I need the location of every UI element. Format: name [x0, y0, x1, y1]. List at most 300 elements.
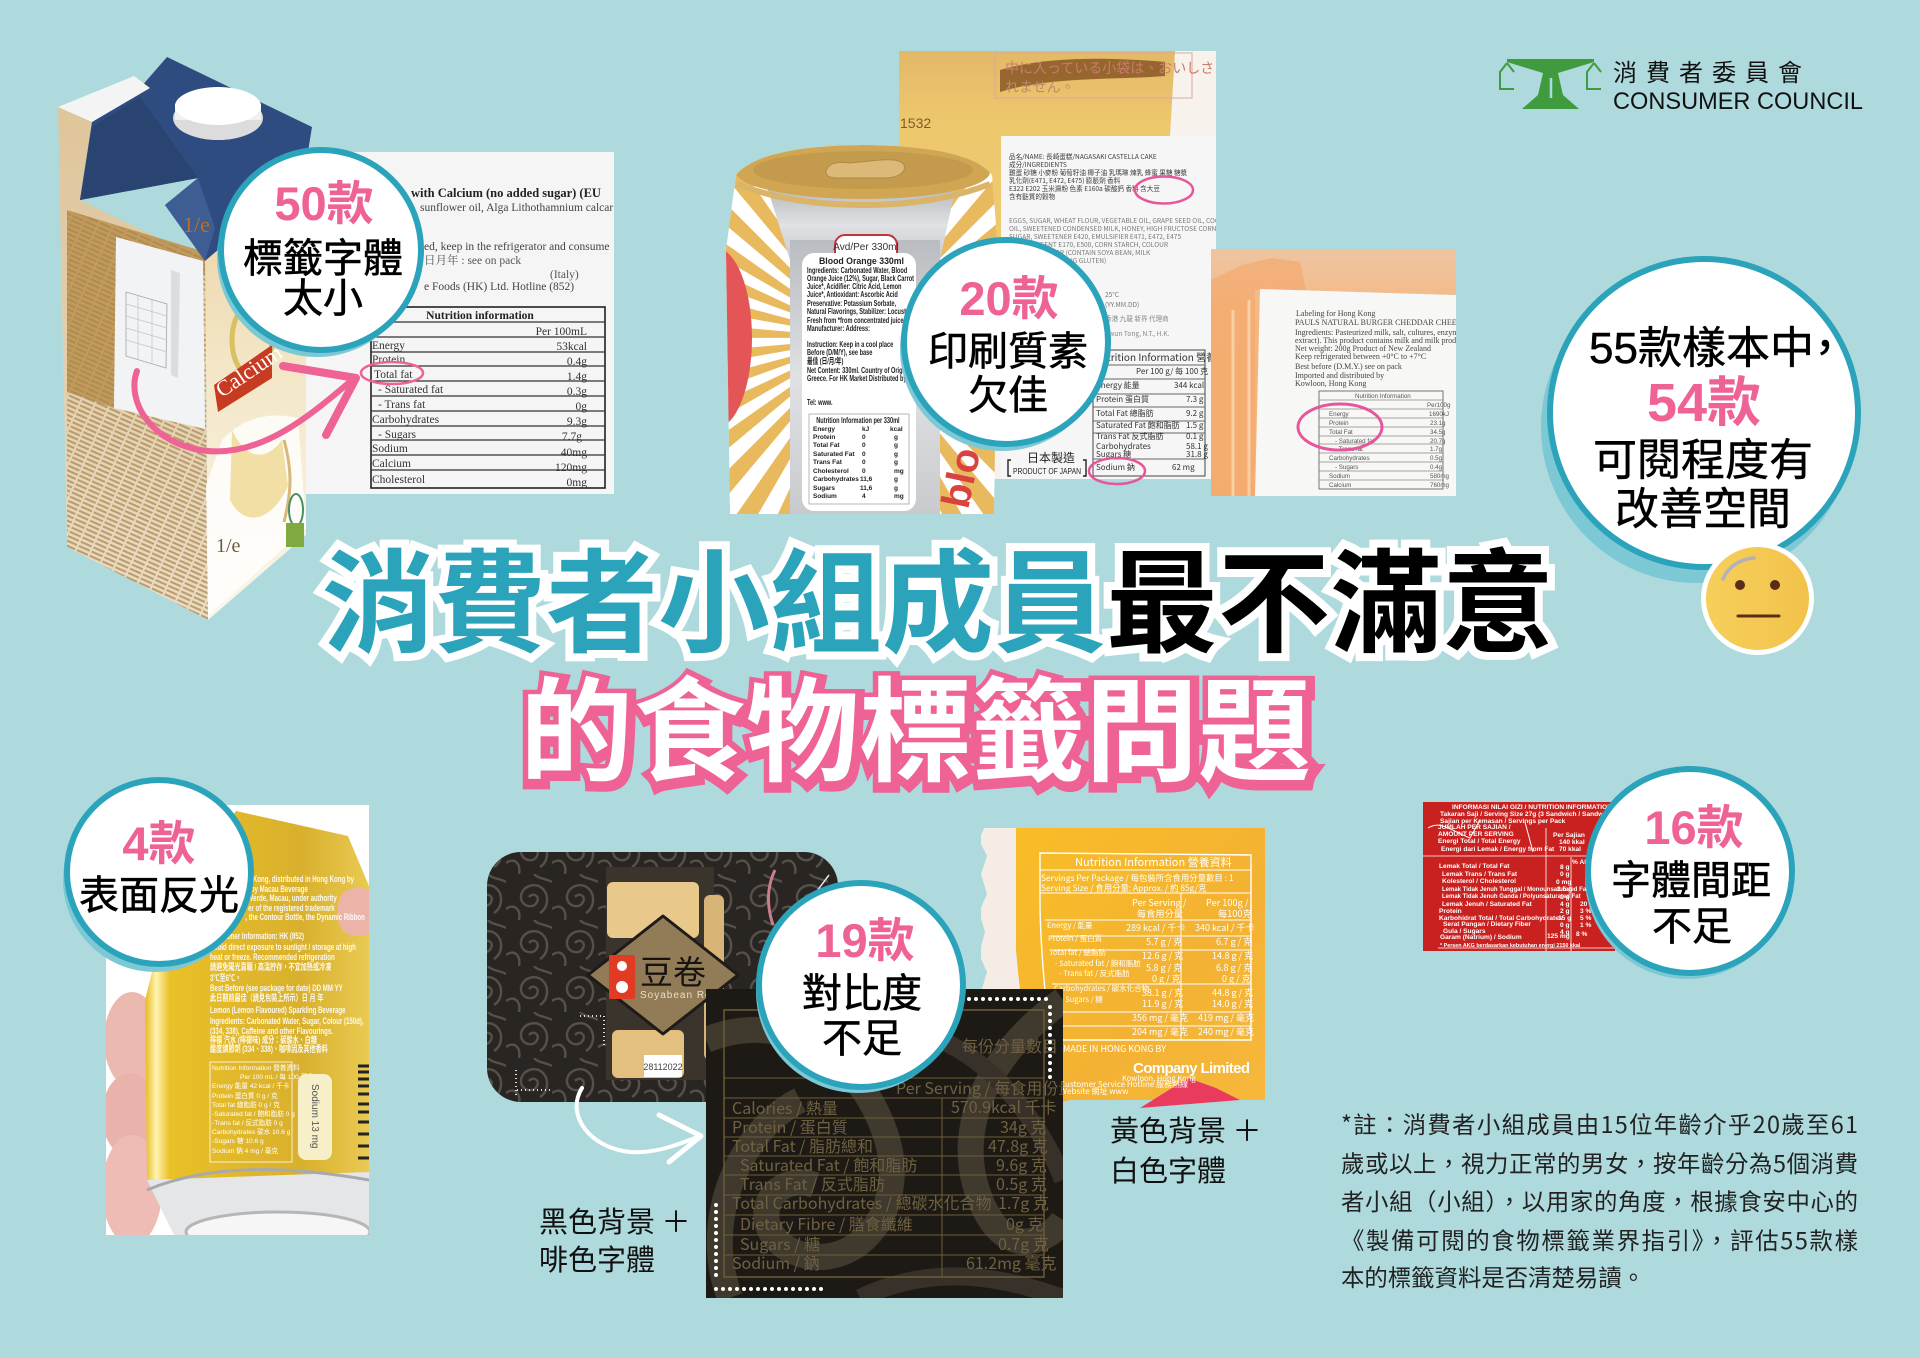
logo: Consumer Council: 消費者委員會: [1613, 53, 1811, 88]
photo: yellow snack pack with white text: 每100克: [1218, 906, 1252, 920]
panel: cake label photo: Sugars 糖: [1096, 449, 1131, 460]
panel: red label with tight text spacing: 4 g: [1560, 901, 1570, 908]
photo: yellow snack pack with white text: 289 kcal / 千卡: [1126, 921, 1185, 934]
panel: red label with tight text spacing: 1 g: [1560, 894, 1570, 901]
photo: reflective yellow can held in hand: -Saturated fat / 飽和脂肪 0 g: [212, 1109, 295, 1118]
callout: 19 samples low contrast: 不足: [822, 1017, 902, 1061]
panel: cheese label photo: 580mg: [1430, 473, 1449, 480]
panel: oat drink label enlargement: Energy: [372, 340, 405, 352]
panel: cheese label photo: Carbohydrates: [1329, 455, 1370, 462]
photo: blood orange drink can: Natural Flavorings, Stabilizer: Locust: [807, 306, 906, 316]
panel: red label with tight text spacing: Gula / Sugars: [1443, 928, 1486, 935]
photo: reflective yellow can held in hand: Consumer Information: HK (852): [210, 931, 304, 941]
panel: cake label photo: 0.1 g: [1186, 431, 1204, 442]
note text: [1341, 1106, 1858, 1293]
panel: red label with tight text spacing: 5 %: [1580, 915, 1591, 922]
photo: blood orange drink can: Juice*, Acidifier: Citric Acid, Lemon: [807, 281, 901, 291]
photo: dark label with low-contrast brown text: Trans Fat / 反式脂肪: [740, 1171, 885, 1195]
photo: yellow snack pack with white text: Carbohydrates / 碳水化合物: [1054, 983, 1150, 994]
title line 1: 消費者小組成員最不滿意: [322, 514, 1554, 676]
panel: cheese label photo: - Trans fat: [1335, 446, 1363, 453]
photo: dark label with low-contrast brown text: 每份分量數目 : 2: [962, 1033, 1079, 1057]
panel: red label with tight text spacing: % AKG: [1572, 859, 1594, 866]
photo: blood orange drink can: Carbohydrates: [813, 476, 859, 483]
panel: cheese label photo: Calcium: [1329, 482, 1351, 489]
panel: red label with tight text spacing: Protein: [1439, 908, 1462, 915]
panel: oat drink label enlargement: 1.4g: [567, 371, 587, 383]
title line 2: 的食物標籤問題: [520, 641, 1311, 805]
photo: reflective yellow can held in hand: er of the registered trademark: [248, 903, 335, 913]
panel: cheese label photo: Kowloon, Hong Kong: [1295, 379, 1366, 388]
panel: oat drink label enlargement: Protein: [372, 354, 405, 366]
panel: cheese label photo: - Saturated fat: [1335, 438, 1374, 445]
panel: oat drink label enlargement: Carbohydrates: [372, 414, 440, 426]
panel: cake label photo: 含有麩質的穀物: [1009, 191, 1056, 201]
photo: dark label with low-contrast brown text: Dietary Fibre / 膳食纖維: [740, 1211, 913, 1235]
photo: yellow snack pack with white text: Servings Per Package / 每包裝所含食用分量數目 : 1: [1041, 872, 1234, 884]
panel: cheese label photo: Labeling for Hong Kong: [1296, 309, 1375, 318]
callout: 4 samples reflective surface: 表面反光: [79, 874, 239, 918]
panel: oat drink label enlargement: 9.3g: [567, 416, 587, 428]
photo: blood orange drink can: mg: [894, 493, 904, 500]
photo: blood orange drink can: g: [894, 434, 898, 441]
photo: dark label with low-contrast brown text: 0g 克: [1006, 1211, 1044, 1235]
photo: blood orange drink can: 4: [862, 493, 866, 500]
caption: yellow background with white text: [1110, 1108, 1262, 1190]
photo: blood orange drink can: Sodium: [813, 493, 837, 500]
photo: yellow snack pack with white text: 0 g / 克: [1222, 972, 1251, 985]
photo: blood orange drink can: Nutrition Information per 330ml: [816, 415, 900, 425]
panel: oat drink label enlargement: ed, keep in the refrigerator and consume: [424, 241, 610, 253]
callout: 16 samples tight spacing: [1585, 769, 1792, 979]
photo: blood orange drink can: 最佳 (日/月/年): [807, 356, 844, 366]
photo: dark label with low-contrast brown text: Saturated Fat / 飽和脂肪: [740, 1152, 917, 1176]
panel: cheese label photo: Best before (D.M.Y.) see on pack: [1295, 362, 1402, 371]
panel: cake label photo: Carbohydrates: [1096, 441, 1151, 452]
photo: dark label with low-contrast brown text: Per Serving / 每食用份量: [896, 1075, 1074, 1099]
panel: cheese label photo: 1.7g: [1430, 446, 1443, 453]
logo: Consumer Council: CONSUMER COUNCIL: [1613, 88, 1863, 115]
callout: 50 samples font too small: [217, 150, 421, 357]
panel: red label with tight text spacing: JUMLAH PER SAJIAN /: [1438, 824, 1511, 831]
panel: red label with tight text spacing: * Persen AKG berdasarkan kebutuhan energi 2150 kkal: [1440, 943, 1581, 949]
panel: cake label photo: 品名/NAME: 長崎蛋糕/NAGASAKI CASTELLA CAKE: [1009, 151, 1157, 161]
panel: red label with tight text spacing: Energi dari Lemak / Energy from Fat: [1441, 846, 1555, 853]
photo: blood orange drink can: Tel: www.: [807, 397, 833, 407]
panel: red label with tight text spacing: Takaran Saji / Serving Size 27g (3 Sandwich / Sandwiches): [1440, 811, 1622, 818]
photo: blood orange drink can: g: [894, 459, 898, 466]
panel: red label with tight text spacing: Lemak Trans / Trans Fat: [1442, 871, 1518, 878]
photo: blood orange drink can: Juice*, Antioxidant: Ascorbic Acid: [807, 289, 898, 299]
photo: yellow snack pack with white text: Per 100g /: [1206, 895, 1249, 909]
panel: red label with tight text spacing: 1 %: [1580, 922, 1591, 929]
panel: red label with tight text spacing: 0 g: [1560, 871, 1570, 878]
panel: cake label photo: Energy 能量: [1096, 380, 1140, 391]
photo: blood orange drink can: Saturated Fat: [813, 451, 855, 458]
panel: cheese label photo: PAULS NATURAL BURGER CHEDDAR CHEESE SLICES: [1295, 318, 1495, 327]
panel: cake label photo: 344 kcal: [1174, 380, 1204, 391]
photo: blood orange drink can: Avd/Per 330ml: [833, 242, 899, 253]
panel: cake label photo: れません。: [1005, 77, 1075, 97]
panel: oat drink label enlargement: 日月年 : see on pack: [424, 253, 521, 267]
photo: reflective yellow can held in hand: Kong, distributed in Hong Kong by: [253, 874, 355, 884]
callout: 4 samples reflective surface: 4款: [122, 817, 196, 870]
panel: cheese label photo: 23.1g: [1430, 420, 1446, 427]
photo: reflective yellow can held in hand: -Sugars 糖 10.6 g: [212, 1136, 264, 1145]
photo: yellow snack pack with white text: 38.1 g / 克: [1142, 986, 1183, 999]
photo: yellow snack pack with white text: Website 網址 www: [1060, 1086, 1129, 1097]
photo: dark label with low-contrast brown text: 570.9kcal 千卡: [951, 1094, 1057, 1118]
panel: cake label photo: CEREALS CONTAINING GLUTEN): [1009, 255, 1106, 265]
photo: reflective yellow can held in hand: Protein 蛋白質 0 g / 克: [212, 1091, 278, 1100]
panel: red label with tight text spacing: 15 g: [1558, 915, 1571, 922]
panel: oat drink label enlargement: Per 100mL: [536, 326, 587, 338]
panel: cake label photo: 香港 九龍 新界 代理商: [1105, 313, 1169, 323]
panel: cheese label photo: - Sugars: [1335, 464, 1358, 471]
photo: blood orange drink can: kJ: [862, 426, 870, 433]
panel: red label with tight text spacing: Garam (Natrium) / Sodium: [1440, 934, 1522, 941]
callout: 19 samples low contrast: 對比度: [802, 972, 922, 1016]
photo: reflective yellow can held in hand: (334, 338), Caffeine and other Flavourings.: [210, 1026, 333, 1036]
photo: yellow snack pack with white text: 340 kcal / 千卡: [1195, 921, 1254, 934]
panel: oat drink label enlargement: 0g: [576, 401, 587, 413]
panel: red label with tight text spacing: 4 g: [1560, 929, 1570, 936]
callout: 20 samples poor print quality: 欠佳: [968, 374, 1048, 418]
panel: cake label photo: Trans Fat 反式脂肪: [1096, 431, 1164, 442]
panel: cake label photo: PRODUCT OF JAPAN: [1013, 466, 1081, 476]
callout: 54 of 55 samples can improve: 可閱程度有: [1593, 436, 1813, 485]
panel: cake label photo: [899, 51, 1238, 479]
photo: reflective yellow can held in hand: Total fat 總脂肪 0 g / 克: [212, 1100, 280, 1109]
photo: reflective yellow can held in hand: -Trans fat / 反式脂肪 0 g: [212, 1118, 283, 1127]
note text: 《製備可閱的食物標籤業界指引》，評估55款樣: [1341, 1222, 1858, 1256]
callout: 54 of 55 samples can improve: 55款樣本中，: [1589, 324, 1847, 373]
photo: yellow snack pack with white text: MADE IN HONG KONG BY: [1063, 1042, 1166, 1055]
panel: oat drink label enlargement: 40mg: [561, 447, 587, 459]
panel: cheese label photo: Net weight: 200g Product of New Zealand: [1295, 344, 1431, 353]
panel: cake label photo: Saturated Fat 飽和脂肪: [1096, 420, 1180, 431]
panel: oat drink label enlargement: - Sugars: [378, 429, 417, 441]
highlight: sodium ring: [1089, 458, 1145, 484]
photo: dark label with low-contrast brown text: Total Carbohydrates / 總碳水化合物: [732, 1190, 992, 1214]
photo: yellow snack pack with white text: 0 g / 克: [1152, 972, 1181, 985]
highlight: total fat ring: [361, 362, 423, 384]
panel: red label with tight text spacing: Lemak Tidak Jenuh Tunggal / Monounsaturated Fat: [1442, 887, 1588, 893]
photo: reflective yellow can held in hand: 檸檬 汽水 (檸檬味) 成分：碳酸水、白糖: [210, 1034, 317, 1045]
note text: 者小組（小組），以用家的角度，根據食安中心的: [1341, 1183, 1858, 1217]
title line 1: 消費者小組成員最不滿意: [322, 514, 1554, 676]
photo: reflective yellow can held in hand: by Macau Beverage: [251, 884, 308, 894]
panel: red label with tight text spacing: 8 g: [1560, 864, 1570, 871]
photo: reflective yellow can held in hand: Sodium 鈉 4 mg / 毫克: [212, 1146, 278, 1155]
panel: red label with tight text spacing: 0 mg: [1556, 879, 1571, 886]
note text: *註：消費者小組成員由15位年齡介乎20歲至61: [1341, 1106, 1858, 1140]
panel: oat drink label enlargement: - Saturated fat: [378, 384, 444, 396]
panel: oat drink label enlargement: Total fat: [374, 369, 413, 381]
photo: yellow snack pack with white text: Total fat / 總脂肪: [1049, 947, 1107, 958]
panel: red label with tight text spacing: INFORMASI NILAI GIZI / NUTRITION INFORMATION: [1452, 804, 1612, 811]
photo: yellow snack pack with white text: 14.8 g / 克: [1212, 949, 1253, 962]
panel: oat drink label enlargement: - Trans fat: [378, 399, 426, 411]
panel: oat drink label enlargement: sunflower oil, Alga Lithothamnium calcar: [420, 202, 613, 214]
photo: yellow snack pack with white text: - Trans fat / 反式脂肪: [1059, 968, 1130, 979]
photo: blood orange drink can: Energy: [813, 426, 835, 433]
photo: blood orange drink can: blo: [934, 444, 989, 512]
panel: oat drink label enlargement: Calcium: [372, 458, 411, 470]
caption: black background with brown text: 啡色字體: [539, 1237, 655, 1279]
caption: yellow background with white text: 黃色背景 ＋: [1110, 1108, 1262, 1150]
photo: yellow snack pack with white text: 204 mg / 毫克: [1132, 1025, 1188, 1038]
photo: blood orange drink can: g: [894, 451, 898, 458]
photo: yellow snack pack with white text: 11.9 g / 克: [1142, 997, 1183, 1010]
photo: blood orange drink can: kcal: [890, 426, 903, 433]
panel: cheese label photo: 0.4g: [1430, 464, 1443, 471]
panel: cheese label photo: Per100g: [1427, 402, 1451, 409]
photo: yellow snack pack with white text: 419 mg / 毫克: [1198, 1011, 1254, 1024]
photo: yellow snack pack with white text: 14.0 g / 克: [1212, 997, 1253, 1010]
photo: yellow snack pack with white text: - Saturated fat / 飽和脂肪: [1055, 958, 1141, 969]
photo: dark label with low-contrast brown text: Sodium / 鈉: [732, 1250, 820, 1274]
photo: yellow snack pack with white text: Energy / 能量: [1047, 920, 1093, 931]
photo: dark label with low-contrast brown text: 9.6g 克: [996, 1152, 1047, 1176]
photo: dark label with low-contrast brown text: 47.8g 克: [988, 1133, 1048, 1157]
photo: reflective yellow can held in hand: [102, 805, 378, 1252]
icon: neutral face emoji: [1704, 544, 1812, 652]
panel: cake label photo: 31.8 g: [1186, 449, 1208, 460]
panel: cake label photo: 9.2 g: [1186, 408, 1204, 419]
photo: reflective yellow can held in hand: Ingredients: Carbonated Water, Sugar, Colour (150d),: [210, 1016, 364, 1026]
panel: red label with tight text spacing: 20 %: [1580, 901, 1595, 908]
panel: red label with tight text spacing: Per Sajian: [1553, 832, 1585, 839]
panel: cheese label photo: Nutrition Information: [1355, 393, 1411, 400]
panel: cake label photo: 62 mg: [1172, 462, 1195, 473]
photo: yellow snack pack with white text: Serving Size / 食用分量: Approx. / 約 85g/克: [1041, 882, 1207, 894]
photo: dark label with low-contrast brown text: 0.7g 克: [998, 1231, 1049, 1255]
panel: cheese label photo: 20.7g: [1430, 438, 1446, 445]
photo: blood orange drink can: g: [894, 485, 898, 492]
photo: reflective yellow can held in hand: Sodium 13 mg: [309, 1084, 320, 1148]
panel: cheese label photo: Ingredients: Pasteurized milk, salt, cultures, enzymes (non-: [1295, 328, 1485, 337]
highlight: cake ingredient ring: [1135, 176, 1193, 204]
photo: reflective yellow can held in hand: Energy 能量 42 kcal / 千卡: [212, 1081, 290, 1090]
panel: red label with tight text spacing: Kolesterol / Cholesterol: [1442, 878, 1516, 885]
photo: yellow snack pack with white text: 240 mg / 毫克: [1198, 1025, 1254, 1038]
photo: reflective yellow can held in hand: 酸度調節劑 (334、338)、咖啡因及其他香料: [210, 1043, 328, 1054]
photo: reflective yellow can held in hand: Verde, Macau, under authority: [249, 893, 337, 903]
photo: yellow snack pack with white text: Company Limited: [1133, 1060, 1250, 1077]
panel: red label with tight text spacing: 125 mg: [1547, 933, 1570, 940]
callout: 20 samples poor print quality: 印刷質素: [928, 330, 1088, 374]
photo: blood orange drink can: Cholesterol: [813, 468, 849, 475]
photo: blood orange drink can: 0: [862, 468, 866, 475]
photo: dark label with low-contrast brown text: 61.2mg 毫克: [966, 1250, 1057, 1274]
panel: red label with tight text spacing: [1423, 802, 1622, 951]
panel: cake label photo: 日本製造: [1027, 449, 1075, 466]
photo: blood orange drink can: Greece. For HK Market Distributed by: [807, 373, 907, 383]
photo: dark label with low-contrast brown text: Protein / 蛋白質: [732, 1114, 848, 1138]
photo: yellow snack pack with white text: 6.7 g / 克: [1216, 935, 1252, 948]
note text: 歲或以上，視力正常的男女，按年齡分為5個消費: [1341, 1145, 1858, 1179]
callout: 54 of 55 samples can improve: 54款: [1647, 373, 1761, 433]
photo: blood orange drink can: Manufacturer: Address:: [807, 323, 870, 333]
callout: 16 samples tight spacing: 字體間距: [1611, 859, 1771, 903]
callout: 16 samples tight spacing: 16款: [1644, 801, 1744, 854]
arrow: pink arrow from carton to label: [134, 366, 356, 451]
photo: dark label with low-contrast brown text: Calories / 熱量: [732, 1095, 838, 1119]
photo: dark label with low-contrast brown text: 0.5g 克: [996, 1171, 1047, 1195]
panel: oat drink label enlargement: 0.3g: [567, 386, 587, 398]
photo: blood orange drink can: Fresh from *from concentrated juice: [807, 315, 903, 325]
panel: cheese label photo: 0.5g: [1430, 455, 1443, 462]
panel: cake label photo: RAISING AGENT E170, E500, CORN STARCH, COLOUR: [1009, 239, 1168, 249]
callout: 16 samples tight spacing: 不足: [1652, 905, 1732, 949]
panel: oat drink label enlargement: [304, 152, 614, 494]
photo: yellow snack pack with white text: Protein / 蛋白質: [1048, 933, 1103, 944]
callout: 54 of 55 samples can improve: 改善空間: [1615, 485, 1791, 534]
panel: red label with tight text spacing: Sajian per Kemasan / Servings per Pack: [1440, 818, 1566, 825]
panel: cheese label photo: 760mg: [1430, 482, 1449, 489]
photo: yellow snack pack with white text: 12.6 g / 克: [1142, 949, 1183, 962]
callout: 20 samples poor print quality: 20款: [959, 272, 1059, 325]
photo: blood orange drink can: Before (D/M/Y), see base: [807, 347, 872, 357]
photo: oat drink carton: [58, 57, 312, 620]
panel: cheese label photo: Protein: [1329, 420, 1349, 427]
highlight: cheese nutrition ring: [1298, 404, 1382, 450]
callout: 54 of 55 samples can improve: [1541, 259, 1858, 583]
panel: cake label photo: 1532: [900, 115, 931, 131]
panel: oat drink label enlargement: Cholesterol: [372, 474, 425, 486]
panel: cheese label photo: 34.5g: [1430, 429, 1446, 436]
photo: dark soybean roll tray: 28112022: [643, 1062, 683, 1072]
photo: oat drink carton: 1/e: [183, 212, 210, 237]
callout: 20 samples poor print quality: [900, 240, 1108, 451]
panel: cake label photo: 58.1 g: [1186, 441, 1208, 452]
panel: cake label photo: EGGS, SUGAR, WHEAT FLOUR, VEGETABLE OIL, GRAPE SEED OIL, COCONUT: [1009, 215, 1237, 225]
callout: 19 samples low contrast: [756, 883, 963, 1093]
panel: cheese label photo: Keep refrigerated between +0°C to +7°C: [1295, 352, 1426, 361]
photo: yellow snack pack with white text: 每食用分量: [1137, 906, 1183, 920]
photo: yellow snack pack with white text: Customer Service Hotline 服務熱線: [1060, 1079, 1188, 1090]
photo: yellow snack pack with white text: Kowloon, Hong Kong: [1122, 1073, 1196, 1084]
panel: red label with tight text spacing: Serat Pangan / Dietary Fiber: [1443, 921, 1531, 928]
photo: reflective yellow can held in hand: Avoid direct exposure to sunlight / storage at high: [210, 942, 356, 952]
photo: blood orange drink can: g: [894, 476, 898, 483]
photo: yellow snack pack with white text: 5.8 g / 克: [1146, 961, 1182, 974]
panel: oat drink label enlargement: e Foods (HK) Ltd. Hotline (852): [424, 281, 574, 293]
photo: yellow snack pack with white text: 356 mg / 毫克: [1132, 1011, 1188, 1024]
callout: 19 samples low contrast: 19款: [815, 914, 915, 967]
panel: red label with tight text spacing: 70 kkal: [1559, 846, 1581, 853]
panel: oat drink label enlargement: with Calcium (no added sugar) (EU: [411, 186, 601, 200]
panel: oat drink label enlargement: 7.7g: [562, 431, 582, 443]
panel: red label with tight text spacing: 8 %: [1576, 931, 1587, 938]
photo: yellow snack pack with white text: Per Serving /: [1132, 895, 1187, 909]
caption: black background with brown text: 黑色背景 ＋: [539, 1199, 690, 1241]
panel: oat drink label enlargement: 0.4g: [567, 356, 587, 368]
photo: yellow snack pack with white text: - Sugars / 糖: [1061, 994, 1103, 1005]
photo: dark label with low-contrast brown text: Sugars / 糖: [740, 1231, 820, 1255]
title: [322, 514, 1554, 808]
photo: reflective yellow can held in hand: Per 100 mL / 每 100 毫升: [240, 1072, 314, 1081]
panel: cake label photo: OIL, SWEETENED CONDENSED MILK, HONEY, HIGH FRUCTOSE CORN SYRUP: [1009, 223, 1238, 233]
panel: cake label photo: 25°C: [1105, 289, 1119, 299]
panel: cake label photo: Sodium 鈉: [1096, 462, 1135, 473]
panel: cake label photo: Per 100 g/ 每 100 克: [1136, 366, 1208, 377]
panel: oat drink label enlargement: 120mg: [555, 462, 587, 474]
photo: blood orange drink can: Sugars: [813, 485, 835, 492]
photo: blood orange drink can: 11,6: [860, 476, 873, 483]
photo: yellow snack pack with white text: [979, 826, 1265, 1108]
panel: cake label photo: Kwun Tong, N.T., H.K.: [1105, 328, 1170, 338]
note text: 本的標籤資料是否清楚易讀。: [1341, 1259, 1645, 1293]
caption: yellow background with white text: 白色字體: [1110, 1148, 1226, 1190]
photo: blood orange drink can: [726, 145, 997, 514]
panel: cake label photo: Total Fat 總脂肪: [1096, 408, 1154, 419]
panel: cheese label photo: [1211, 249, 1456, 496]
panel: cheese label photo: Energy: [1329, 411, 1350, 418]
photo: reflective yellow can held in hand: Best Before (see package for date) DD MM YY: [210, 983, 343, 993]
panel: oat drink label enlargement: Nutrition information: [426, 310, 534, 322]
panel: oat drink label enlargement: 53kcal: [556, 341, 587, 353]
panel: cake label photo: 中に入っている小袋は、おいしさ: [1005, 58, 1214, 78]
photo: blood orange drink can: Trans Fat: [813, 459, 843, 466]
photo: blood orange drink can: 0: [862, 434, 866, 441]
panel: red label with tight text spacing: AMOUNT PER SERVING: [1438, 831, 1514, 838]
panel: red label with tight text spacing: 3 %: [1580, 908, 1591, 915]
panel: cake label photo: 雞蛋 砂糖 小麥粉 葡萄籽油 椰子油 乳瑪琳 煉乳 蜂蜜 果糖 糖漿: [1009, 167, 1188, 177]
panel: red label with tight text spacing: 0 g: [1560, 922, 1570, 929]
logo: Consumer Council: [1500, 53, 1863, 115]
photo: blood orange drink can: 11,6: [860, 485, 873, 492]
photo: dark label with low-contrast brown text: 1.7g 克: [998, 1190, 1049, 1214]
panel: cake label photo: 1.5 g: [1186, 420, 1204, 431]
panel: cake label photo: trition Information 營養資料: [1107, 349, 1236, 364]
photo: blood orange drink can: Ingredients: Carbonated Water, Blood: [807, 265, 907, 275]
photo: yellow snack pack with white text: 5.7 g / 克: [1146, 935, 1182, 948]
photo: reflective yellow can held in hand: , the Contour Bottle, the Dynamic Ribbon: [245, 912, 365, 922]
photo: blood orange drink can: Net Content: 330ml. Country of Origin:: [807, 365, 909, 375]
panel: cake label photo: CALCIUM, FLAVOR (CONTAIN SOYA BEAN, MILK: [1009, 247, 1151, 257]
panel: cake label photo: SUGAR, SWEETENER E420, EMULSIFIER E471, E472, E475: [1009, 231, 1181, 241]
panel: cake label photo: Protein 蛋白質: [1096, 394, 1149, 405]
photo: reflective yellow can held in hand: Carbohydrates 碳水 10.6 g: [212, 1127, 291, 1136]
panel: red label with tight text spacing: Lemak Total / Total Fat: [1439, 863, 1510, 870]
panel: cake label photo: 乳化劑(E471, E472, E475) 膨脹劑 香料: [1009, 175, 1121, 185]
photo: dark label with low-contrast brown text: 34g 克: [1000, 1114, 1046, 1138]
photo: blood orange drink can: 0: [862, 459, 866, 466]
photo: blood orange drink can: mg: [894, 468, 904, 475]
panel: oat drink label enlargement: (Italy): [550, 269, 579, 281]
photo: yellow snack pack with white text: Nutrition Information 營養資料: [1075, 854, 1232, 870]
callout: 50 samples font too small: 50款: [274, 177, 374, 230]
photo: reflective yellow can held in hand: Lemon (Lemon Flavoured) Sparkling Beverage: [210, 1005, 346, 1015]
photo: blood orange drink can: 0: [862, 451, 866, 458]
photo: blood orange drink can: Blood Orange 330ml: [819, 256, 904, 266]
photo: blood orange drink can: g: [894, 442, 898, 449]
photo: blood orange drink can: Orange Juice (12%), Sugar, Black Carrot: [807, 273, 915, 283]
caption: black background with brown text: [539, 1199, 690, 1279]
panel: red label with tight text spacing: Energi Total / Total Energy: [1438, 838, 1521, 845]
panel: cake label photo: 成分/INGREDIENTS: [1009, 159, 1067, 169]
photo: blood orange drink can: 0: [862, 442, 866, 449]
panel: cake label photo: (YY.MM.DD): [1105, 299, 1139, 309]
panel: cheese label photo: 1690kJ: [1429, 411, 1449, 418]
photo: yellow snack pack with white text: 44.8 g / 克: [1212, 986, 1253, 999]
photo: reflective yellow can held in hand: 請避免陽光直曬 / 高溫貯存，不宜加熱或冷凍: [210, 961, 331, 972]
callout: 50 samples font too small: 太小: [283, 277, 363, 321]
photo: oat drink carton: 1/e: [216, 535, 241, 557]
panel: cheese label photo: Sodium: [1329, 473, 1350, 480]
